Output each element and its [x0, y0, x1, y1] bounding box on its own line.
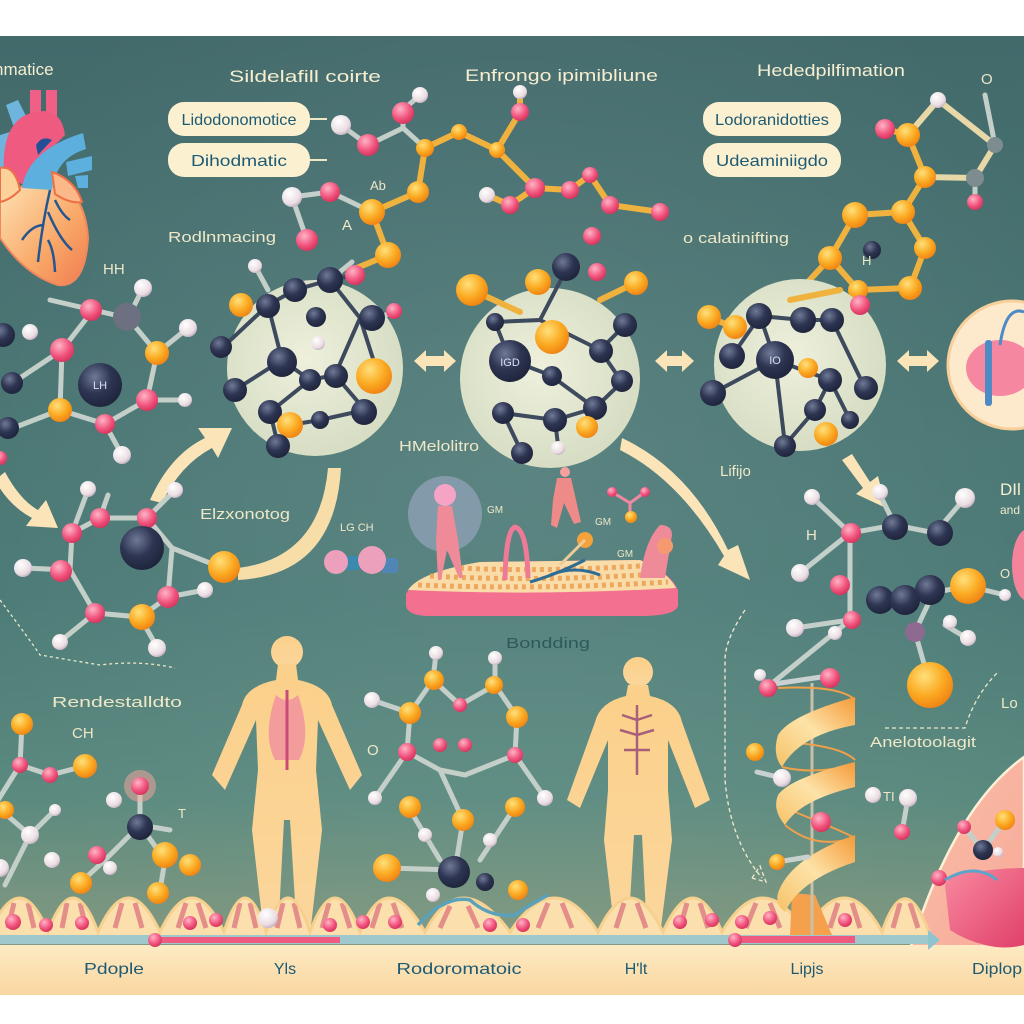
- molecule: small right: [865, 787, 917, 840]
- timeline label: Yls: Yls: [274, 961, 296, 978]
- molecule chain: top centre: A: [342, 217, 352, 234]
- sphere molecule: right: [697, 279, 886, 457]
- label: Anelotoolagit: Anelotoolagit: [870, 734, 977, 751]
- molecule network: lower left: [0, 713, 201, 904]
- icon: liver: [931, 810, 1024, 948]
- molecule network: lower left: CH: [72, 725, 94, 742]
- dna wave strip: [0, 895, 930, 935]
- small molecule: pill: [324, 522, 398, 574]
- platform: tissue scene: [406, 467, 678, 616]
- molecule chain: top centre: [282, 85, 669, 270]
- timeline label: Rodoromatoic: Rodoromatoic: [396, 961, 522, 978]
- heading: Sildelafill coirte: Sildelafill coirte: [229, 67, 381, 86]
- arrow: right sphere to lower: [842, 454, 886, 508]
- molecule: glow circle and liver backdrop: [905, 757, 1024, 966]
- sphere molecule: centre: [456, 253, 648, 468]
- label pill: Lodoranidotties: Lodoranidotties: [715, 112, 829, 129]
- icon: human body front: [212, 636, 362, 935]
- molecule ring: left: [0, 279, 197, 465]
- double arrow: [897, 350, 939, 372]
- sphere molecule: centre: IGD: [500, 357, 520, 369]
- timeline label: H'lt: H'lt: [625, 961, 648, 978]
- arrow: up to left sphere: [150, 428, 232, 503]
- right edge labels and shape: and: [1000, 503, 1020, 517]
- icon: anatomical heart: [0, 90, 92, 285]
- label: Bondding: Bondding: [506, 635, 590, 652]
- small molecule: pill: LG CH: [340, 522, 374, 534]
- platform: tissue scene: GM: [617, 549, 633, 560]
- timeline label: Pdople: Pdople: [84, 961, 144, 978]
- icon: human body back: [567, 657, 710, 935]
- double arrow: [655, 350, 694, 372]
- label pill: Lodoranidotties: [703, 102, 841, 136]
- molecule ring: top right hexagons: O: [981, 71, 993, 88]
- label pill: Lidodonomotice: Lidodonomotice: [182, 112, 297, 129]
- molecule network: centre bottom: O: [367, 742, 379, 759]
- arrow: sweep from sphere: [238, 468, 341, 580]
- heading: Hededpilfimation: Hededpilfimation: [757, 61, 905, 80]
- dashed connector: right: [885, 672, 998, 728]
- sphere molecule: left: [210, 259, 403, 458]
- label pill: Udeaminiigdo: [703, 143, 841, 177]
- molecule ring: lower left: [14, 481, 240, 657]
- label pill: Udeaminiigdo: Udeaminiigdo: [716, 153, 828, 170]
- molecule: small right: TI: [883, 789, 895, 804]
- double arrow: [414, 350, 456, 372]
- molecule ring: top right hexagons: H: [862, 253, 871, 268]
- arrow: left curved: [0, 472, 58, 528]
- dashed connector: left: [0, 600, 175, 668]
- molecule ring: top right hexagons: [795, 71, 1003, 300]
- platform: tissue scene: GM: [595, 517, 611, 528]
- label pill: Lidodonomotice: [168, 102, 327, 136]
- platform: tissue scene: GM: [487, 505, 503, 516]
- molecule cluster: right: H: [806, 527, 817, 544]
- right edge labels and shape: [1000, 480, 1024, 712]
- molecule cluster: right: [770, 484, 1011, 708]
- circle inset: protein: [948, 301, 1024, 429]
- heading: Rodlnmacing: Rodlnmacing: [168, 229, 276, 246]
- label: Elzxonotog: Elzxonotog: [200, 506, 290, 523]
- molecule ring: left: LH: [93, 380, 107, 392]
- right edge labels and shape: Lo: [1001, 695, 1018, 712]
- molecule network: lower left: T: [178, 806, 186, 821]
- molecule network: centre bottom: [364, 646, 553, 902]
- right edge labels and shape: DIl: [1000, 480, 1021, 499]
- label pill: Dihodmatic: [168, 143, 327, 177]
- dashed connector: helix: [725, 610, 766, 882]
- timeline arrow: [0, 930, 940, 950]
- label: HMelolitro: HMelolitro: [399, 438, 479, 455]
- timeline label: Diplop: Diplop: [972, 961, 1022, 978]
- heading: Enfrongo ipimibliune: Enfrongo ipimibliune: [465, 66, 658, 85]
- sphere molecule: right: IO: [769, 355, 781, 367]
- arrow: centre to lower right: [620, 438, 750, 580]
- timeline label: Lipjs: Lipjs: [791, 961, 823, 978]
- dna helix ribbon: [746, 668, 855, 935]
- label: Rendestalldto: Rendestalldto: [52, 694, 182, 711]
- bottom strip: [0, 945, 1024, 995]
- molecule cluster: right: O: [1000, 566, 1010, 581]
- molecule chain: top centre: Ab: [370, 178, 386, 193]
- label: HH: HH: [103, 261, 125, 278]
- heading: o calatinifting: o calatinifting: [683, 230, 789, 247]
- label pill: Dihodmatic: Dihodmatic: [191, 153, 287, 170]
- label: Lifijo: Lifijo: [720, 463, 751, 480]
